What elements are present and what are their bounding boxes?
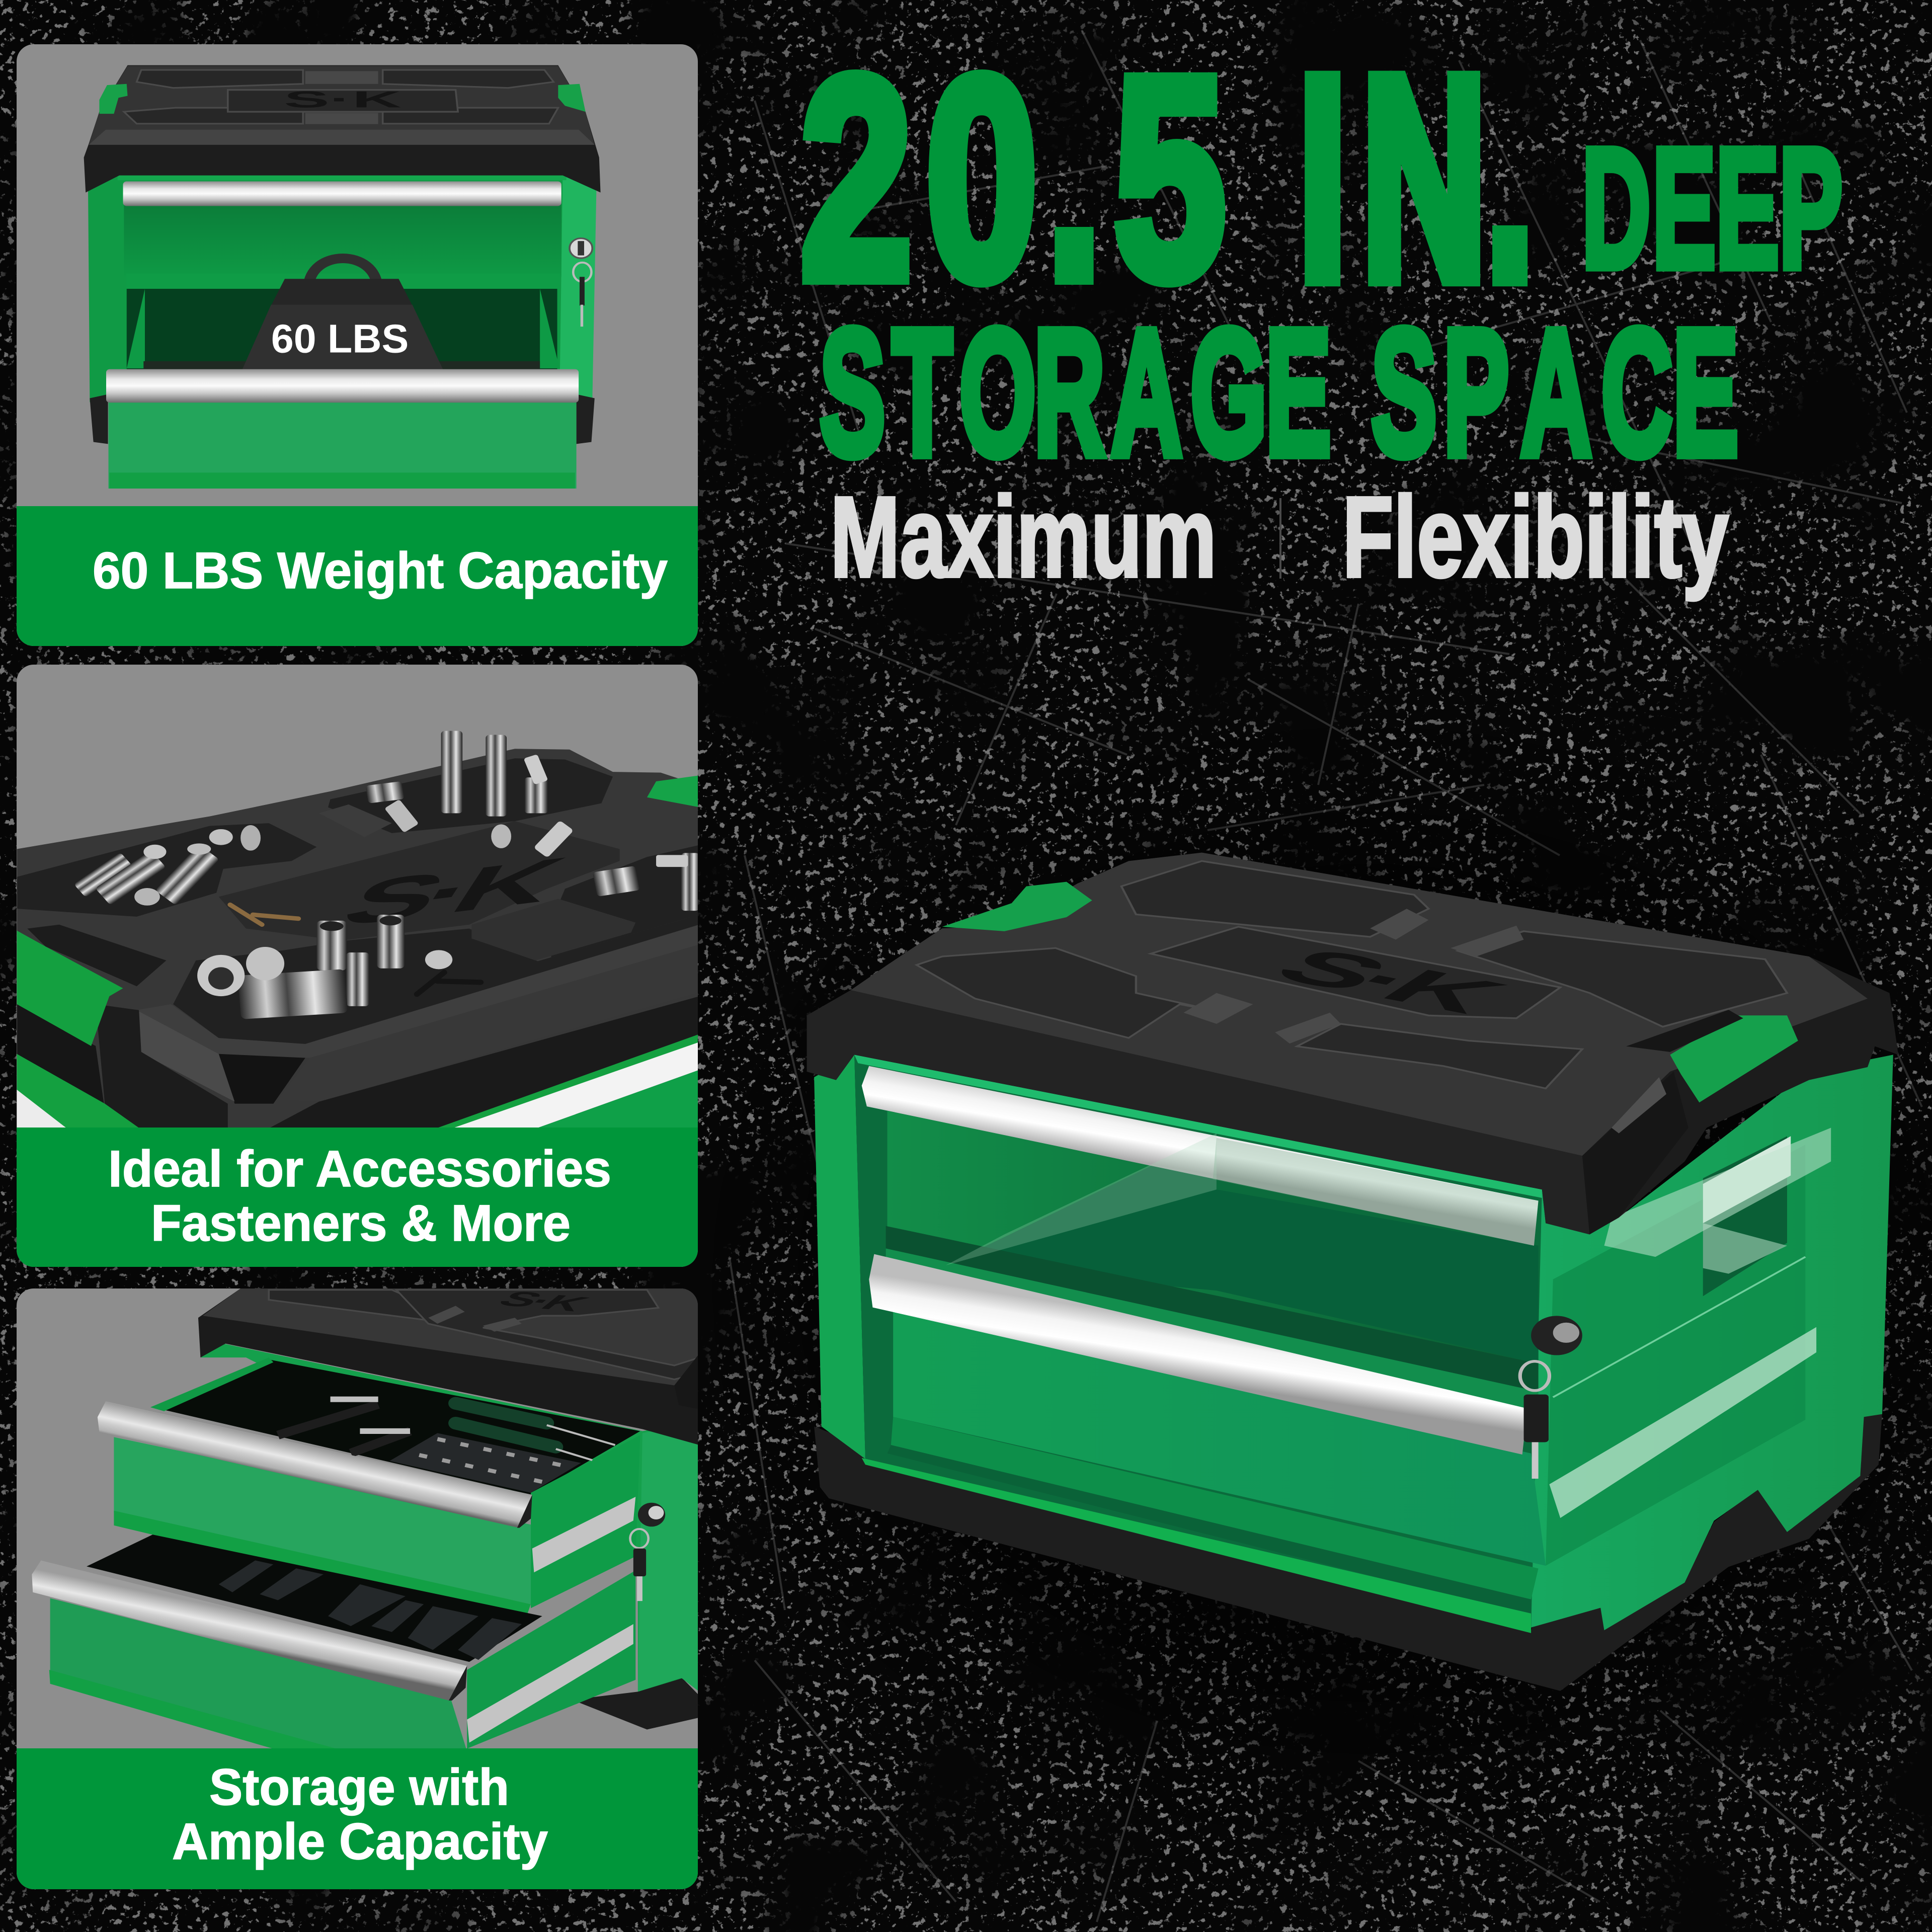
green latch left and body xyxy=(17,931,123,1046)
lid xyxy=(198,1286,699,1445)
caption text: Ample Capacity xyxy=(172,1813,548,1870)
heading: storage space: STORAGE SPACE xyxy=(820,292,1738,493)
icon: lock and key xyxy=(630,1503,665,1601)
caption text xyxy=(172,1758,548,1870)
caption text: Storage with xyxy=(209,1758,509,1816)
icon: lid top xyxy=(84,65,601,193)
lid front faces xyxy=(137,925,699,1058)
icon: screws xyxy=(230,905,480,994)
latches xyxy=(942,882,1092,931)
title: 20.5 in. deep: 20.5 xyxy=(800,19,1226,339)
subheading: maximum flexibility: Maximum xyxy=(830,473,1217,601)
lid recesses xyxy=(17,758,699,1044)
illustration: front view tool chest with weight xyxy=(84,65,601,489)
panel: 60 LBS weight capacity xyxy=(17,44,698,646)
icon: lock and key xyxy=(570,238,592,327)
panel: accessories on lid xyxy=(17,665,699,1267)
tool tray upper xyxy=(278,1399,615,1493)
handles xyxy=(862,1066,1539,1455)
caption text: 60 LBS Weight Capacity xyxy=(93,542,668,599)
lid recesses xyxy=(917,861,1787,1088)
lid: S·K xyxy=(490,1286,597,1316)
title: 20.5 in. deep: IN. xyxy=(1299,17,1534,338)
caption band xyxy=(17,1128,698,1267)
icon: lock and keys xyxy=(1520,1316,1582,1479)
front post xyxy=(814,1055,865,1459)
subheading: maximum flexibility: Flexibility xyxy=(1342,473,1729,601)
lower drawer xyxy=(32,1535,635,1751)
caption text: Fasteners & More xyxy=(151,1194,571,1252)
icon: sockets xyxy=(74,731,699,1019)
base xyxy=(814,1413,1882,1691)
main illustration: tool chest with transparent drawers xyxy=(807,853,1898,1691)
illustration: open drawers with tools xyxy=(32,1286,699,1751)
green latch right xyxy=(647,775,699,807)
drawer interior xyxy=(854,1055,1546,1633)
caption text: Ideal for Accessories xyxy=(108,1140,611,1197)
icon: latches xyxy=(99,84,586,114)
title: 20.5 in. deep: DEEP xyxy=(1582,113,1842,304)
caption text xyxy=(108,1140,611,1252)
icon: 60 lbs weight: 60 LBS xyxy=(271,316,409,361)
illustration: lid top with sockets and fasteners xyxy=(17,731,699,1130)
caption band xyxy=(17,506,698,646)
subheading: maximum flexibility xyxy=(830,473,1729,601)
caption band xyxy=(17,1748,698,1889)
title: 20.5 in. deep xyxy=(800,17,1842,339)
panel: storage with ample capacity xyxy=(17,1286,699,1889)
lid xyxy=(807,853,1898,1235)
logo on lid: S·K xyxy=(1254,938,1525,1023)
logo on lid: S·K xyxy=(327,843,579,940)
upper drawer xyxy=(98,1357,640,1623)
icon: 60 lbs weight xyxy=(243,259,443,369)
lower drawer xyxy=(90,369,595,489)
logo on lid: S·K xyxy=(284,87,402,113)
side panel xyxy=(1531,1055,1893,1630)
